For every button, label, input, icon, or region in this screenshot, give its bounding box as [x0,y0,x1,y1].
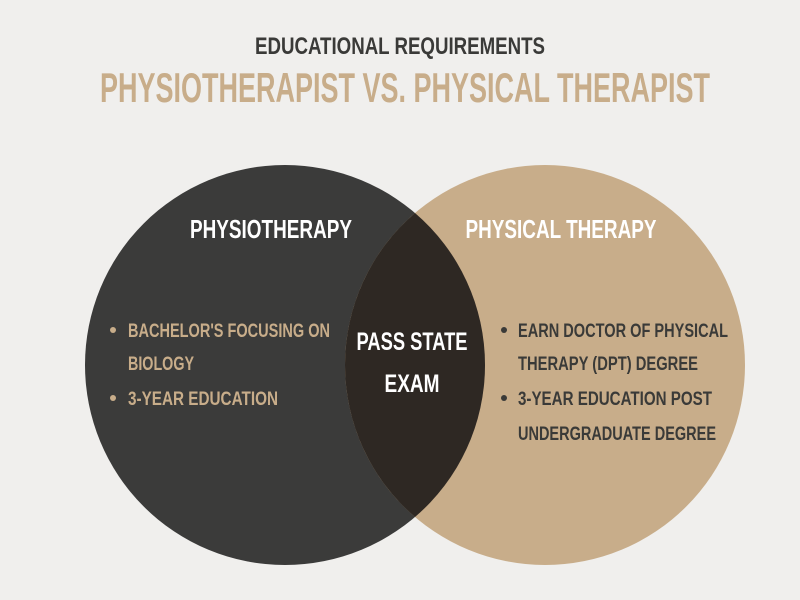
heading: physical therapy: PHYSICAL THERAPY [466,214,656,244]
subtitle: EDUCATIONAL REQUIREMENTS [255,33,545,60]
heading: physiotherapy: PHYSIOTHERAPY [190,214,352,244]
list: physiotherapy: BIOLOGY [128,354,194,375]
list: physical therapy: UNDERGRADUATE DEGREE [518,424,716,445]
center text: pass state exam [356,328,468,398]
center text: pass state exam: PASS STATE [356,328,468,356]
venn diagram [85,165,745,565]
center text: pass state exam: EXAM [384,370,440,398]
circle: physical therapy [345,165,745,565]
circle: physiotherapy [85,165,485,565]
intersection [345,213,485,517]
list: physiotherapy: BACHELOR'S FOCUSING ON [128,321,330,342]
list: physical therapy [501,321,728,445]
list: physiotherapy: 3-YEAR EDUCATION [128,389,278,410]
list: physical therapy: 3-YEAR EDUCATION POST [518,389,712,410]
list: physiotherapy [110,321,330,410]
list: physical therapy: THERAPY (DPT) DEGREE [518,354,698,375]
list: physical therapy: EARN DOCTOR OF PHYSICAL [518,321,728,342]
